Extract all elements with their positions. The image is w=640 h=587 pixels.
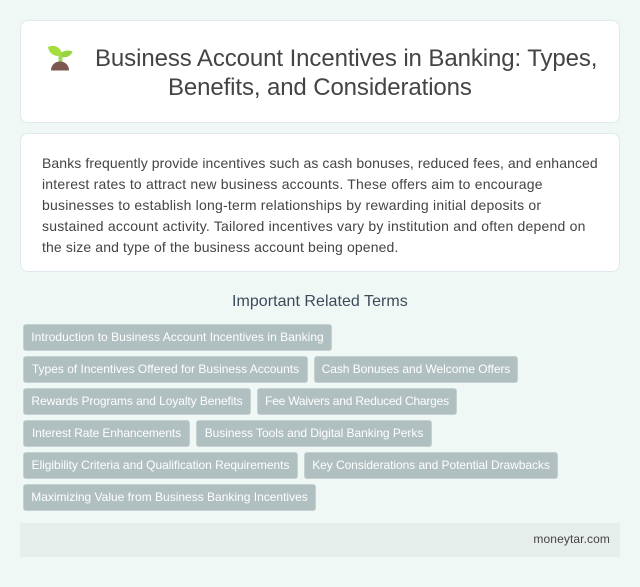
chip xyxy=(304,452,558,479)
description text: sustained account activity. Tailored incentives vary by institution and often depend on xyxy=(42,218,586,234)
chip: Introduction to Business Account Incentives in Banking xyxy=(31,330,324,344)
chip: Business Tools and Digital Banking Perks xyxy=(205,426,423,440)
chip xyxy=(23,388,251,415)
chip xyxy=(23,356,308,383)
title line 2: Benefits, and Considerations xyxy=(168,74,472,101)
icon: seedling xyxy=(48,46,72,70)
description text: interest rates to attract new business accounts. These offers aim to encourage xyxy=(42,176,543,192)
description text: the size and type of the business account being opened. xyxy=(42,239,398,255)
title line 1: Business Account Incentives in Banking: Types, xyxy=(95,45,597,72)
chip: Eligibility Criteria and Qualification Requirements xyxy=(32,458,289,472)
chip xyxy=(23,420,190,447)
chip: Types of Incentives Offered for Business Accounts xyxy=(32,362,299,376)
chip xyxy=(196,420,432,447)
chip: Key Considerations and Potential Drawbacks xyxy=(312,458,550,472)
description text xyxy=(42,155,598,255)
chip: Fee Waivers and Reduced Charges xyxy=(265,394,449,408)
chip xyxy=(23,324,332,351)
panel: title card xyxy=(20,20,620,123)
chip xyxy=(314,356,518,383)
panel: description xyxy=(20,133,620,272)
chip: Rewards Programs and Loyalty Benefits xyxy=(31,394,243,408)
footer bar xyxy=(20,523,620,557)
chip xyxy=(257,388,457,415)
chip: Interest Rate Enhancements xyxy=(32,426,181,440)
chip xyxy=(23,484,316,511)
chip: Maximizing Value from Business Banking Incentives xyxy=(31,490,308,504)
term chips xyxy=(23,324,558,511)
description text: Banks frequently provide incentives such as cash bonuses, reduced fees, and enhanced xyxy=(42,155,598,171)
footer source: moneytar.com xyxy=(533,532,610,546)
chip xyxy=(23,452,298,479)
heading: related terms: Important Related Terms xyxy=(232,293,408,310)
chip: Cash Bonuses and Welcome Offers xyxy=(322,362,510,376)
description text: businesses to establish long-term relationships by rewarding initial deposits or xyxy=(42,197,541,213)
